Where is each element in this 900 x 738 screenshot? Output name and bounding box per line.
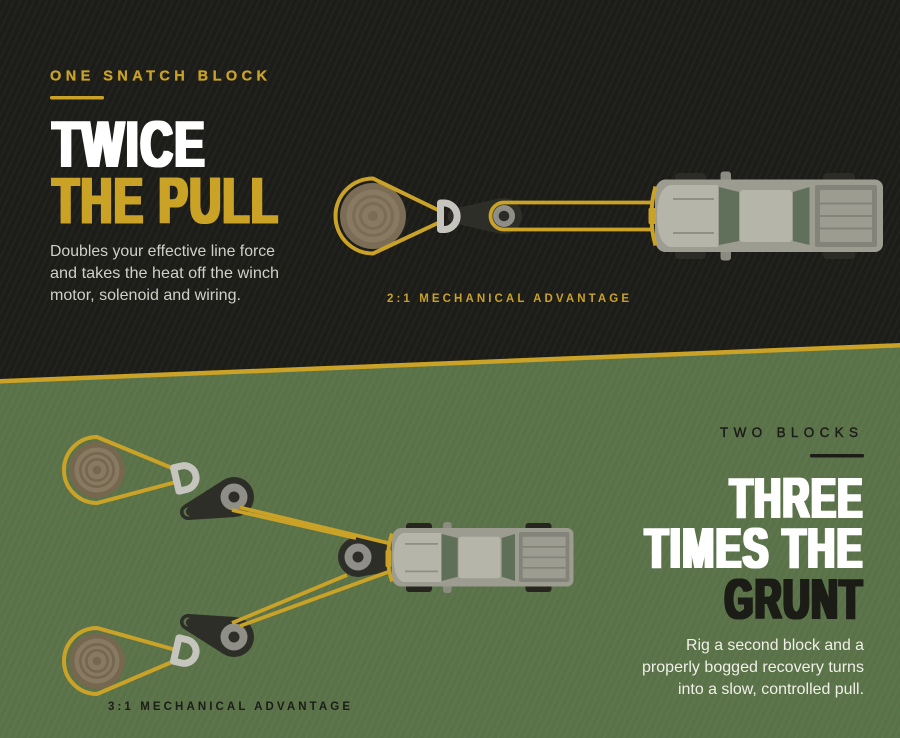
diagram: single block rigging <box>336 172 883 260</box>
icon: upper shackle <box>174 463 198 491</box>
panel: dark upper background <box>0 0 900 400</box>
icon: snatch block <box>448 198 522 234</box>
icon: centre truck block <box>338 537 388 577</box>
text block: bottom description: properly bogged recovery turns <box>642 659 864 676</box>
icon: lower tree log <box>69 633 125 689</box>
diagonal gold divider <box>0 343 900 384</box>
text block: bottom description <box>642 637 864 698</box>
text block: top description <box>50 243 279 304</box>
heading: twice the pull: THE PULL <box>52 164 280 237</box>
eyebrow: one snatch block: ONE SNATCH BLOCK <box>50 68 268 84</box>
icon: shackle <box>440 203 457 230</box>
icon: lower block <box>180 614 254 657</box>
tree strap <box>336 178 438 254</box>
heading: three times the grunt <box>645 467 864 631</box>
lower tree strap <box>64 628 176 694</box>
caption: 2:1 mechanical advantage: 2:1 MECHANICAL ADVANTAGE <box>387 293 629 305</box>
eyebrow: two blocks: TWO BLOCKS <box>720 425 858 440</box>
truck: top view <box>655 172 883 260</box>
upper tree strap <box>64 437 176 503</box>
heading: twice the pull: TWICE <box>52 108 206 180</box>
truck bumper <box>648 186 656 246</box>
icon: tree log <box>340 183 406 249</box>
text block: top description: Doubles your effective line force <box>50 243 275 260</box>
text block: bottom description: into a slow, controlled pull. <box>678 681 864 698</box>
text block: top description: motor, solenoid and wiring. <box>50 287 241 304</box>
accent rule bottom <box>810 454 864 458</box>
winch line <box>490 202 651 230</box>
truck: top view <box>392 522 574 593</box>
icon: upper tree log <box>69 442 125 498</box>
diagram: double block rigging <box>64 437 574 694</box>
text block: top description: and takes the heat off the winch <box>50 265 279 282</box>
heading: twice the pull <box>52 108 280 237</box>
winch lines <box>232 508 388 626</box>
panel: green lower background <box>0 345 900 738</box>
truck bumper <box>386 534 392 582</box>
icon: upper block <box>180 477 254 520</box>
accent rule top <box>50 96 104 100</box>
caption: 3:1 mechanical advantage: 3:1 MECHANICAL ADVANTAGE <box>108 701 350 713</box>
icon: lower shackle <box>174 638 198 666</box>
text block: bottom description: Rig a second block and a <box>686 637 864 654</box>
